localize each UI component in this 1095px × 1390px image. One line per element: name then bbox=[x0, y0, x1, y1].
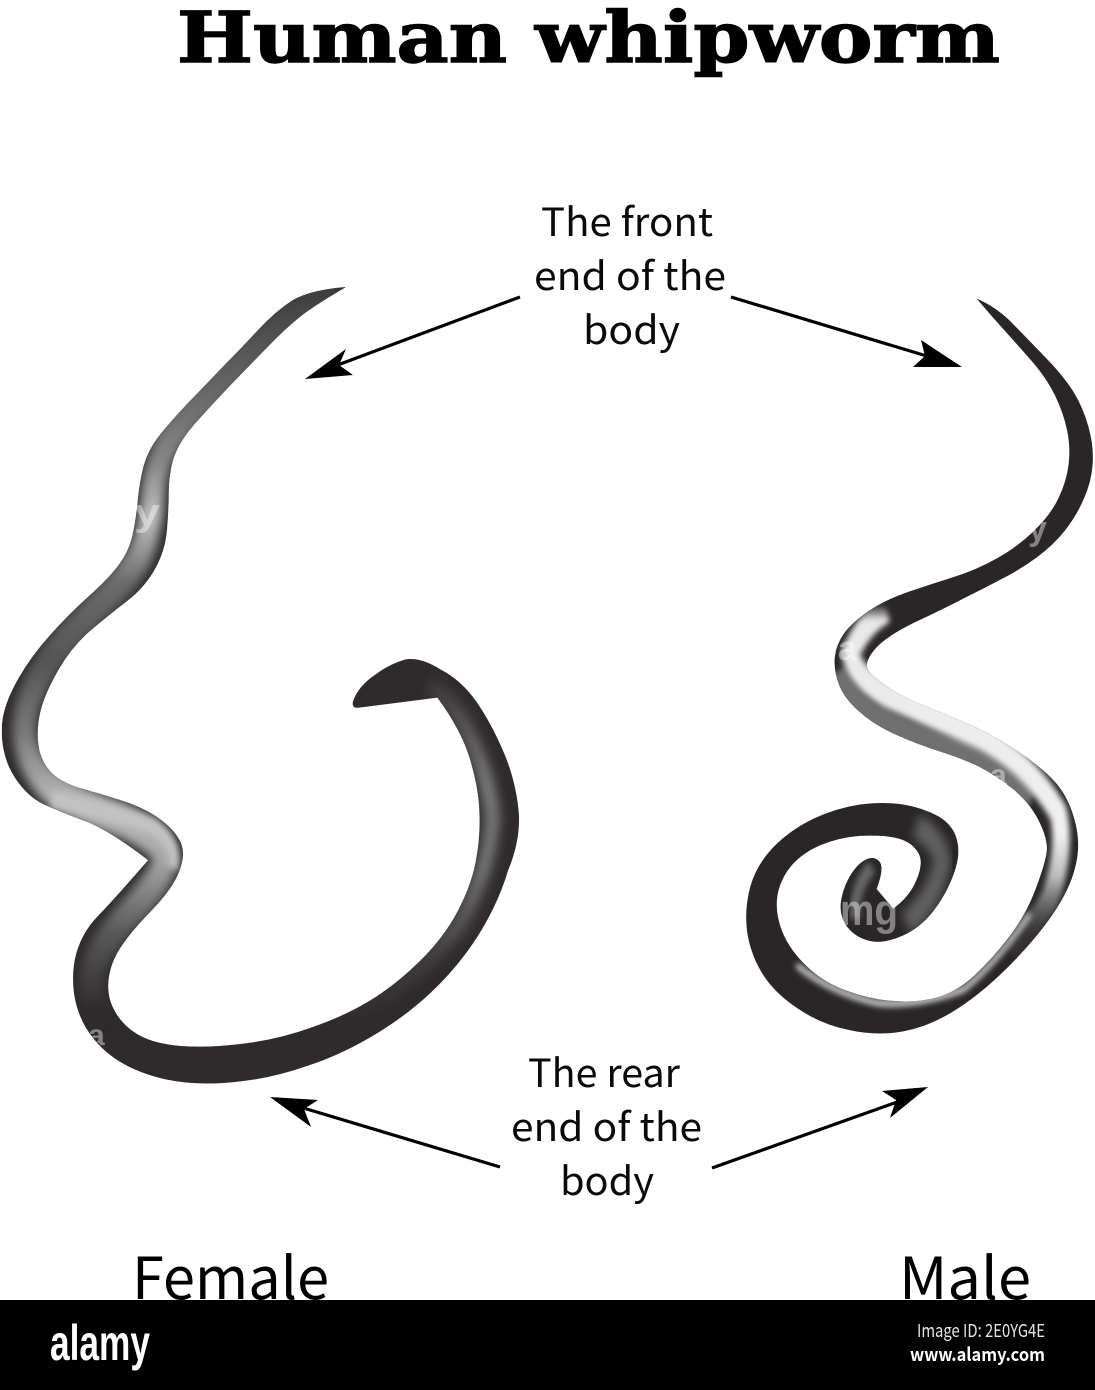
illustration: female whipworm bbox=[0, 270, 534, 1100]
arrow: to female rear end bbox=[270, 1097, 500, 1167]
website: www.alamy.com bbox=[910, 1341, 1045, 1367]
label: front end of the body: The front bbox=[541, 192, 713, 248]
label: rear end of the body bbox=[511, 1043, 702, 1207]
watermark fragments: y bbox=[134, 492, 160, 534]
coil shading bbox=[907, 825, 942, 923]
label: Female: Female bbox=[132, 1232, 329, 1316]
thin lower rim highlight bbox=[797, 914, 1030, 1004]
arrow: to male rear end bbox=[712, 1087, 928, 1168]
watermark fragments: a bbox=[388, 1019, 405, 1052]
arrow: to male front end bbox=[731, 297, 962, 367]
image id: Image ID: 2E0YG4E bbox=[917, 1317, 1045, 1343]
watermark fragments: a bbox=[990, 759, 1007, 792]
label: rear end of the body: body bbox=[560, 1151, 654, 1207]
label: front end of the body bbox=[534, 192, 726, 356]
watermark fragments: a bbox=[838, 630, 858, 668]
watermark fragments bbox=[88, 492, 1047, 1052]
white highlight bbox=[851, 610, 1061, 948]
footer bar bbox=[0, 1300, 1095, 1390]
arrow: to female front end bbox=[305, 297, 520, 379]
illustration: male whipworm bbox=[730, 280, 1095, 1050]
label: front end of the body: end of the bbox=[534, 246, 726, 302]
label: rear end of the body: end of the bbox=[511, 1097, 702, 1153]
label: Male: Male bbox=[899, 1232, 1031, 1316]
logo: alamy: alamy bbox=[50, 1315, 150, 1371]
watermark fragments: mg bbox=[840, 886, 898, 935]
label: front end of the body: body bbox=[583, 300, 680, 356]
label: rear end of the body: The rear bbox=[528, 1043, 681, 1099]
watermark fragments: a bbox=[88, 1019, 105, 1052]
watermark fragments: y bbox=[1028, 510, 1047, 548]
band underside shading bbox=[836, 673, 1030, 803]
